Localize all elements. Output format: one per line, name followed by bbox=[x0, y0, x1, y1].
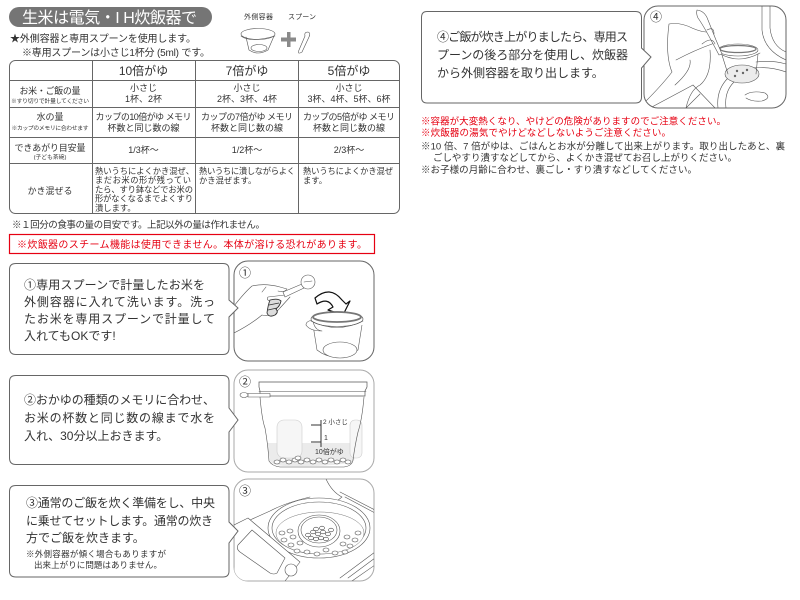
panel: step 1 text bbox=[10, 264, 238, 354]
row: rice amount: 小さじ bbox=[335, 83, 363, 93]
icon: arrow into cup bbox=[315, 292, 350, 315]
icon: outer container and spoon: スプーン bbox=[288, 13, 316, 21]
icon: rice grains bbox=[274, 456, 351, 464]
row: stirring bbox=[28, 166, 394, 213]
notes: ※10 倍、7 倍がゆは、ごはんとお水が分離して出来上がります。取り出したあと、裏 bbox=[421, 140, 785, 152]
row: stirring: 熱いうちによくかき混ぜ、 bbox=[95, 166, 194, 176]
measure scale: 1 bbox=[324, 435, 328, 442]
panel: step 3 text: に乗せてセットします。通常の炊き bbox=[26, 513, 213, 528]
measure scale: 10倍がゆ bbox=[315, 447, 344, 456]
row: stirring: かき混ぜます。 bbox=[199, 176, 256, 186]
panel: step 3 illustration bbox=[234, 479, 375, 581]
panel: step 4 text bbox=[422, 12, 651, 103]
icon: cup held by spoon bbox=[718, 44, 760, 83]
measure scale: 2 小さじ bbox=[323, 417, 348, 426]
row: water amount: 水の量 bbox=[36, 111, 64, 122]
table header row: 7倍がゆ bbox=[226, 63, 268, 78]
row: finished amount: 1/3杯～ bbox=[128, 144, 159, 155]
table header row bbox=[119, 63, 370, 78]
panel: step 4 text: から外側容器を取り出します。 bbox=[437, 66, 604, 80]
red cautions bbox=[421, 116, 726, 139]
panel: step 3 text: 方でご飯を炊きます。 bbox=[26, 530, 145, 545]
step number 4: ④ bbox=[650, 10, 662, 24]
notes: ※お子様の月齢に合わせ、裏ごし・すり潰すなどしてください。 bbox=[421, 164, 697, 176]
comparison table bbox=[10, 60, 400, 214]
row: water amount: カップの10倍がゆ メモリ bbox=[96, 111, 192, 122]
intro text: ※専用スプーンは小さじ1杯分 (5ml) です。 bbox=[22, 46, 210, 59]
step number 3: ③ bbox=[239, 484, 251, 498]
step number 2: ② bbox=[239, 375, 251, 389]
step 3 small note: ※外側容器が傾く場合もありますが bbox=[26, 549, 166, 559]
icon: cup cross section with water bbox=[259, 382, 367, 467]
table header row: 5倍がゆ bbox=[328, 63, 370, 78]
row: stirring: 形がなくなるまでよくすり bbox=[95, 194, 193, 204]
intro text: ★外側容器と専用スプーンを使用します。 bbox=[10, 32, 196, 45]
icon: control panel bbox=[234, 518, 300, 581]
panel: step 1 text: ①専用スプーンで計量したお米を bbox=[24, 277, 205, 292]
red warning box bbox=[10, 234, 374, 254]
row: water amount: カップの7倍がゆ メモリ bbox=[201, 111, 293, 122]
panel: step 1 text: たお米を専用スプーンで計量して bbox=[24, 311, 215, 326]
row: rice amount: 小さじ bbox=[130, 83, 157, 93]
icon: outer container and spoon bbox=[241, 12, 316, 53]
panel: step 4 text: ④ご飯が炊き上がりましたら、専用ス bbox=[437, 29, 628, 44]
red warning box: ※炊飯器のスチーム機能は使用できません。本体が溶ける恐れがあります。 bbox=[17, 238, 367, 251]
row: water amount bbox=[12, 111, 395, 133]
icon: measuring cup bbox=[306, 312, 363, 358]
panel: step 1 illustration bbox=[234, 261, 374, 361]
panel: step 4 illustration bbox=[644, 6, 786, 108]
icon: centered cup bbox=[298, 515, 340, 547]
row: rice amount: 小さじ bbox=[233, 83, 261, 93]
icon: spoon in water bbox=[240, 392, 270, 398]
panel: step 2 text: ②おかゆの種類のメモリに合わせ、 bbox=[24, 393, 215, 407]
panel: step 2 illustration bbox=[234, 370, 374, 472]
icon: hand with spoon bbox=[234, 275, 315, 333]
icon: rice grains in cup bbox=[306, 526, 334, 541]
row: rice amount: お米・ご飯の量 bbox=[20, 85, 80, 96]
step 3 small note bbox=[26, 549, 166, 570]
row: stirring: ます。 bbox=[303, 176, 327, 186]
row: finished amount: 2/3杯～ bbox=[334, 144, 364, 155]
table footnote: ※１回分の食事の量の目安です。上記以外の量は作れません。 bbox=[12, 219, 265, 231]
notes bbox=[421, 140, 785, 176]
panel: step 2 text: お米の杯数と同じ数の線まで水を bbox=[24, 410, 215, 425]
row: stirring: 潰します。 bbox=[95, 203, 136, 213]
row: water amount: 杯数と同じ数の線 bbox=[211, 122, 283, 133]
notes: ごしやすり潰すなどしてから、よくかき混ぜてお召し上がりください。 bbox=[433, 152, 737, 164]
row: water amount: カップの5倍がゆ メモリ bbox=[303, 111, 395, 122]
icon: rice grains in pot bbox=[279, 529, 361, 556]
panel: step 1 text: 外側容器に入れて洗います。洗っ bbox=[24, 295, 215, 309]
panel: step 4 text: プーンの後ろ部分を使用し、炊飯器 bbox=[437, 47, 628, 62]
icon: outer container and spoon: 外側容器 bbox=[244, 12, 273, 21]
panel: step 3 text bbox=[10, 486, 238, 577]
row: finished amount: 1/2杯～ bbox=[232, 144, 262, 155]
panel: step 2 text: 入れ、30分以上おきます。 bbox=[24, 429, 168, 443]
row: stirring: 熱いうちに潰しながらよく bbox=[199, 166, 295, 176]
row: rice amount: 2杯、3杯、4杯 bbox=[217, 93, 277, 104]
row: water amount: ※カップのメモリに合わせます bbox=[12, 124, 89, 132]
row: rice amount: 1杯、2杯 bbox=[125, 93, 162, 104]
step 3 small note: 出来上がりに問題はありません。 bbox=[34, 560, 162, 570]
panel: step 1 text: 入れてもOKです! bbox=[24, 329, 116, 343]
row: stirring: たら、すり鉢などでお米の bbox=[95, 184, 193, 194]
row: rice amount: 3杯、4杯、5杯、6杯 bbox=[307, 93, 391, 104]
step number 1: ① bbox=[239, 266, 251, 280]
icon: hand holding spoon bbox=[645, 10, 722, 108]
red cautions: ※容器が大変熱くなり、やけどの危険がありますのでご注意ください。 bbox=[421, 116, 726, 128]
icon: rice cooker rim bbox=[650, 6, 786, 108]
panel: step 2 text bbox=[10, 376, 238, 464]
title pill: 生米は電気・I H炊飯器で bbox=[22, 9, 197, 27]
row: stirring: まだお米の形が残ってい bbox=[95, 175, 191, 185]
measure scale bbox=[311, 417, 348, 456]
intro text bbox=[10, 32, 210, 59]
table header row: 10倍がゆ bbox=[119, 63, 168, 78]
row: water amount: 杯数と同じ数の線 bbox=[107, 122, 180, 133]
panel: step 3 text: ③通常のご飯を炊く準備をし、中央 bbox=[26, 495, 215, 510]
row: rice amount: ※すり切りで計量してください bbox=[11, 97, 89, 105]
row: water amount: 杯数と同じ数の線 bbox=[313, 122, 385, 133]
row: stirring: かき混ぜる bbox=[28, 186, 72, 196]
red cautions: ※炊飯器の湯気でやけどなどしないようご注意ください。 bbox=[421, 127, 671, 139]
icon: rice cooker body bbox=[250, 479, 375, 581]
row: finished amount: できあがり目安量 bbox=[14, 142, 86, 153]
row: stirring: 熱いうちによくかき混ぜ bbox=[303, 166, 394, 176]
row: finished amount bbox=[14, 142, 364, 161]
row: rice amount bbox=[11, 83, 391, 105]
row: finished amount: (子ども茶碗) bbox=[34, 153, 66, 161]
